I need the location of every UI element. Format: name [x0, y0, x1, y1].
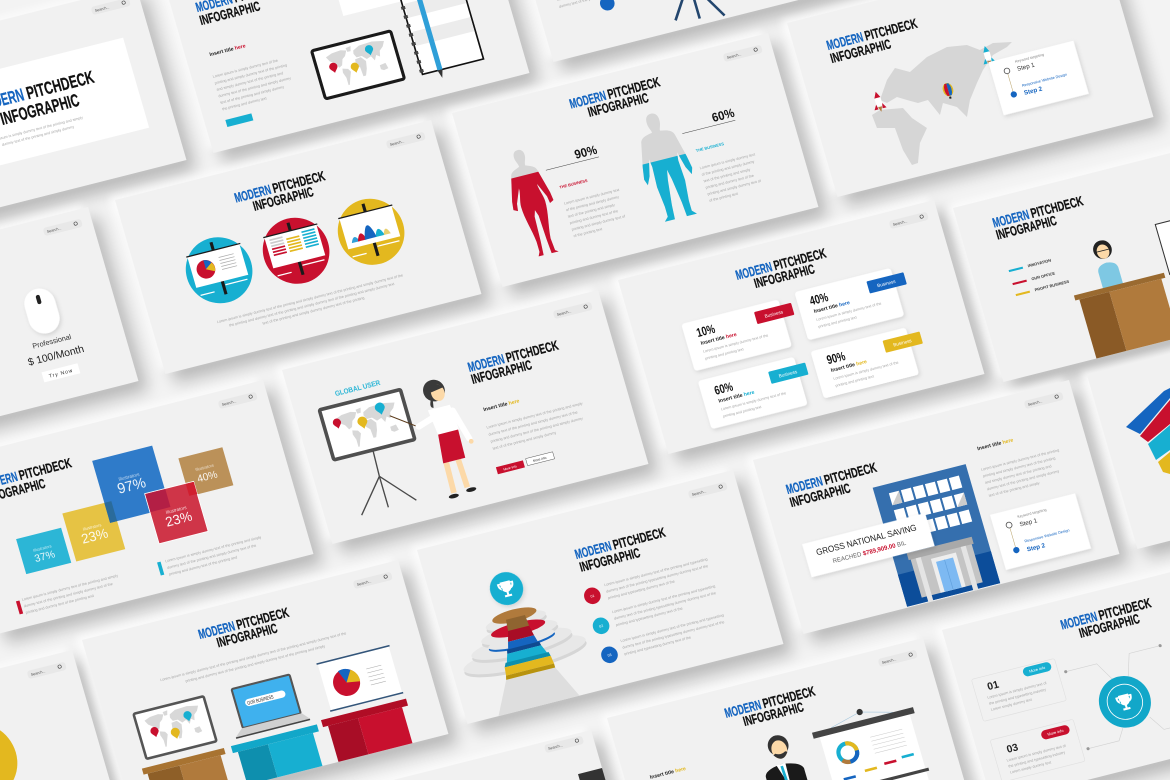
card 60%: Insert title here: [718, 390, 755, 404]
paragraph: Lorem ipsum is simply dummy text of the printing: [981, 448, 1060, 472]
search bar: Search...: [892, 219, 908, 227]
banner gross national saving: [802, 513, 935, 577]
card 01: 01: [986, 680, 1001, 693]
icon: cyan circle pie board: [178, 230, 260, 310]
square 37%: Illustrators: [32, 543, 52, 553]
title: MODERN: [825, 29, 865, 53]
panel: business cards slide: [618, 200, 984, 454]
paragraph: and simply dummy text of the printing and: [216, 71, 284, 92]
item 02: printing and typesetting dummy text of the: [615, 607, 683, 627]
text block left: dummy text of the printing and simply dummy text of the: [23, 582, 113, 608]
paragraph: Lorem ipsum is simply dummy text of the: [212, 59, 278, 79]
square 23% yellow: 23%: [80, 526, 110, 547]
icon: rocket red: [870, 90, 887, 113]
item 03: Lorem ipsum is simply dummy text of the printing and typesetting: [620, 613, 724, 643]
card 10%: Lorem ipsum is simply dummy text of the: [703, 333, 769, 354]
yellow circle: [0, 730, 18, 780]
notebook with pencil: [388, 0, 486, 82]
world map: [872, 42, 1012, 165]
description: dummy text of the printing and simply dummy: [1, 125, 75, 147]
search bar: [27, 662, 67, 679]
presenter figure: [1090, 238, 1124, 291]
panel: hub slide bottom right: [942, 550, 1170, 780]
item 03: [598, 613, 729, 665]
legend: [1008, 255, 1070, 297]
item 03: printing and typesetting dummy text of the: [624, 636, 692, 656]
search bar: [553, 302, 593, 319]
paragraph right: Lorem ipsum is simply dummy text: [699, 153, 756, 170]
banner gross national saving: REACHED $789,909.00 BIL: [832, 540, 907, 565]
card 90%: Insert title here: [830, 359, 868, 374]
card 60%: Lorem ipsum is simply dummy text of the: [721, 391, 787, 412]
title: MODERN: [784, 473, 824, 497]
card 01: More info: [1029, 665, 1046, 674]
icon: rocket cyan: [979, 44, 997, 67]
card 90%: Business: [893, 338, 913, 348]
tablet with world map: [312, 31, 404, 99]
description: Lorem ipsum is simply dummy text of the printing and simply dummy text of the printing and simply dummy text of the: [160, 631, 347, 682]
man in suit: [755, 731, 812, 780]
try now button: [41, 363, 80, 382]
board: [1155, 204, 1170, 274]
card 01: [971, 658, 1067, 721]
search bar: Search...: [221, 399, 237, 407]
paragraph: Lorem ipsum is simply dummy text of the printing and simply: [486, 402, 583, 430]
paragraph: printing and simply dummy text of the printing: [214, 63, 288, 85]
square 23% yellow: Illustrators: [82, 522, 102, 532]
card 10%: [681, 297, 803, 371]
paragraph left: of the printing and simply dummy: [566, 195, 619, 212]
search bar: [878, 650, 918, 667]
tripod legs: [666, 0, 725, 27]
step card: Step 2: [1023, 85, 1044, 97]
paragraph: text of of the printing and simply dummy: [220, 85, 285, 105]
square 97%: Illustrators: [118, 472, 141, 482]
title: MODERN: [991, 207, 1031, 231]
panel: mouse pricing slide: [0, 207, 138, 461]
paragraph left: [564, 188, 629, 238]
white title panel: [0, 38, 149, 177]
icon: layered chevron arrows: [1126, 388, 1170, 474]
numbered circle: [598, 0, 616, 12]
legend: PROFIT BUSINESS: [1034, 279, 1070, 292]
card 40%: printing and printing text: [818, 315, 857, 329]
panel: world map steps slide: [787, 0, 1157, 208]
card 40%: 40%: [808, 290, 830, 308]
square 23% red: 23%: [164, 509, 194, 530]
search bar: Search...: [691, 489, 707, 497]
card 90%: 90%: [825, 349, 847, 367]
panel: global user presenter slide: [282, 290, 648, 544]
button red: More info: [503, 464, 517, 472]
title: PITCHDECK: [234, 605, 291, 632]
search bar: Search...: [46, 226, 62, 234]
panel: presenter man slide: [607, 638, 973, 780]
search bar: [688, 482, 728, 499]
paragraph: the printing and dummy text: [222, 96, 267, 111]
card 01: the printing and typesetting industry: [989, 688, 1047, 706]
search bar: Search...: [30, 669, 46, 677]
square 40%: Illustrators: [195, 463, 214, 472]
square 37%: [16, 528, 71, 574]
card 60%: [698, 355, 817, 429]
text block left: Lorem ipsum is simply dummy text of the printing and simply: [21, 574, 119, 602]
card 60%: 60%: [713, 380, 735, 398]
item 01: 01: [590, 594, 595, 599]
description: printing and dummy text of the printing and simply dummy text of the printing and simply: [185, 644, 326, 683]
title: [734, 246, 832, 295]
square 23% red: [145, 481, 208, 544]
text block right: [157, 535, 266, 578]
item 02: Lorem ipsum is simply dummy text of the printing and typesetting: [612, 584, 716, 614]
title: PITCHDECK: [606, 74, 662, 102]
card 03: Lorem simply dummy text: [1010, 760, 1052, 775]
insert title: Insert title here: [209, 43, 247, 58]
title: INFOGRAPHIC: [469, 357, 534, 387]
step card: Step 1: [1016, 62, 1036, 73]
paragraph right: printing and simply dummy text of: [707, 179, 762, 196]
title: INFOGRAPHIC: [788, 480, 852, 510]
item 02: 02: [599, 624, 604, 629]
pyramid tiers: [451, 594, 590, 685]
paragraph right: of the printing text: [709, 192, 738, 203]
paragraph right: text of the printing and simply: [703, 168, 751, 183]
title: PITCHDECK: [611, 525, 667, 552]
title: [233, 168, 330, 218]
title: INFOGRAPHIC: [829, 36, 893, 66]
step card: [990, 493, 1091, 570]
title: INFOGRAPHIC: [251, 184, 315, 214]
card 60%: printing and printing text: [723, 405, 762, 419]
search bar: [386, 132, 426, 149]
title: [723, 684, 821, 733]
title: INFOGRAPHIC: [1077, 611, 1142, 641]
card 10%: printing and printing text: [705, 347, 744, 361]
card 03: the printing and typesetting industry: [1008, 750, 1066, 769]
title: PITCHDECK: [271, 168, 327, 196]
search bar: Search...: [1027, 399, 1043, 407]
text block right: dummy text of the printing and simply dummy text of the: [167, 544, 257, 570]
chart board: [316, 645, 403, 712]
red podium: [321, 698, 412, 762]
title: MODERN: [196, 618, 237, 642]
step card: Keyword targeting: [1015, 53, 1045, 64]
paragraph: printing and dummy text of the printing and simply dummy: [490, 417, 583, 444]
description: Lorem ipsum is simply dummy text of the printing and simply dummy text of the printing and simply dummy text of the: [217, 273, 404, 324]
text block right: Lorem ipsum is simply dummy text of the printing and simply: [165, 535, 262, 563]
white card: [333, 0, 400, 16]
laptop: [222, 673, 310, 739]
title: [568, 74, 665, 124]
card 90%: Lorem ipsum is simply dummy text of the: [833, 361, 899, 381]
brown podium: [142, 748, 237, 780]
description: text of the printing and simply dummy dummy text of the printing: [262, 296, 365, 326]
title: MODERN: [233, 182, 273, 206]
title: PITCHDECK: [761, 684, 817, 711]
search bar: [1024, 392, 1064, 409]
hanger: [828, 701, 893, 728]
title: MODERN: [568, 88, 608, 112]
paragraph: dummy text of the printing and simply dummy: [986, 469, 1060, 491]
title: [573, 525, 671, 575]
panel: circles slide: [115, 120, 481, 374]
paragraph: dummy text of the printing and simply dummy: [218, 76, 291, 98]
tablet with map: [133, 696, 217, 759]
card 10%: Insert title here: [700, 332, 738, 347]
insert title: Insert title here: [977, 437, 1014, 452]
search bar: [353, 572, 393, 589]
card 40%: Lorem ipsum is simply dummy text of the: [816, 302, 882, 322]
title: INFOGRAPHIC: [994, 213, 1059, 243]
item 01: Lorem ipsum is simply dummy text of the printing and typesetting: [604, 557, 708, 587]
paragraph: and simply dummy text of the printing and: [984, 464, 1052, 485]
square 37%: 37%: [33, 549, 56, 565]
panel: arrows slide: [1087, 295, 1170, 549]
button outline: More info: [533, 456, 547, 463]
search bar: Search...: [881, 657, 897, 665]
title: PITCHDECK: [17, 455, 73, 483]
title: INFOGRAPHIC: [578, 545, 642, 575]
title: MODERN: [1059, 609, 1099, 633]
panel: speaker desk slide: [953, 128, 1170, 382]
card 01: Lorem ipsum is simply dummy text of: [987, 681, 1048, 700]
paragraph right: printing and dummy text of the: [705, 174, 754, 190]
search bar: [91, 0, 131, 15]
paragraph: text of of the printing and simply dummy: [492, 431, 557, 451]
step card: Keyword targeting: [1017, 508, 1047, 519]
square 97%: 97%: [116, 475, 148, 498]
connector dots: [1063, 644, 1170, 751]
cyan podium: [231, 724, 330, 780]
paragraph: [981, 448, 1067, 498]
search bar: Search...: [356, 579, 372, 587]
title: MODERN: [734, 259, 774, 283]
search bar: [43, 219, 83, 236]
item 01: dummy text of the printing typesetting dummy dummy text of the: [606, 564, 709, 594]
description: the printing and dummy text of the printing and simply dummy text of the printing and simply dummy text: [229, 282, 395, 328]
search bar: Search...: [94, 5, 110, 13]
paragraph: dummy text of the printing and simply dummy text of the: [488, 410, 578, 437]
card 10%: 10%: [695, 322, 717, 340]
laptop: OUR BUSINESS: [247, 694, 275, 707]
panel: cover slide top left: [0, 0, 186, 240]
title: PITCHDECK: [1029, 193, 1085, 221]
step card: Responsive Website Design: [1024, 528, 1070, 544]
card 60%: Business: [778, 369, 798, 379]
card 40%: Business: [876, 279, 897, 288]
text block left: printing and dummy text of the printing and: [25, 594, 94, 615]
dark device: [578, 768, 606, 780]
title: PITCHDECK: [504, 338, 560, 365]
button: [225, 113, 253, 127]
title: MODERN: [573, 538, 613, 562]
item 03: dummy text of the printing typesetting dummy dummy text of the: [622, 620, 725, 650]
search bar: [889, 212, 929, 229]
search bar: Search...: [548, 743, 563, 751]
icon: yellow circle area board: [330, 192, 412, 272]
search bar: [544, 736, 584, 753]
stat 90%: 90%: [573, 143, 599, 162]
woman presenter: [383, 374, 488, 508]
title: [0, 67, 102, 134]
card 40%: Insert title here: [813, 300, 851, 315]
search bar: [723, 45, 763, 62]
item 02: dummy text of the printing typesetting dummy dummy text of the: [613, 591, 717, 621]
panel: podiums slide: [82, 560, 450, 780]
panel: pyramid slide: [417, 470, 784, 726]
icon: computer mouse: [21, 285, 63, 337]
title: [196, 605, 294, 654]
title: PITCHDECK: [772, 246, 828, 273]
search bar: [218, 392, 258, 409]
square 23% red: Illustrators: [165, 505, 188, 515]
title: INFOGRAPHIC: [752, 261, 817, 291]
paragraph: [212, 57, 295, 111]
paragraph: [486, 402, 589, 451]
panel: illustrators squares slide: [0, 380, 313, 634]
card 90%: printing and printing text: [835, 374, 874, 388]
card 03: Lorem ipsum is simply dummy text of: [1006, 744, 1067, 763]
insert title: Insert title here: [483, 398, 520, 413]
paragraph left: Lorem ipsum is simply dummy text: [564, 188, 620, 206]
building: [873, 464, 1000, 608]
paragraph right: of the printing and simply dummy: [701, 160, 755, 177]
square 40%: 40%: [196, 470, 219, 485]
card 40%: [794, 265, 915, 340]
item 01: [582, 557, 712, 606]
item 01: printing and typesetting dummy text of the: [608, 580, 675, 600]
hub circle with trophy: [1093, 670, 1157, 733]
stat 60%: 60%: [710, 106, 736, 125]
paragraph: text of of the printing and simply: [988, 481, 1040, 498]
connectors: [1065, 646, 1170, 749]
title: PITCHDECK: [24, 67, 96, 103]
legend: OUR OFFICE: [1031, 270, 1056, 281]
title: MODERN: [466, 351, 506, 375]
podium desk: [1074, 273, 1170, 359]
stairs column: [490, 611, 555, 680]
square 23% yellow: [62, 501, 125, 561]
panel: top centre slide: [503, 0, 869, 62]
pricing label: Professional: [31, 332, 73, 351]
icon: hot air balloon: [941, 82, 956, 100]
title: MODERN: [723, 697, 763, 721]
paragraph left: printing and dummy text of the: [569, 209, 619, 225]
step card: Step 2: [1026, 542, 1047, 553]
price: $ 100/Month: [27, 344, 86, 369]
search bar: Search...: [556, 309, 572, 317]
presentation board with map: [319, 389, 415, 460]
search bar: Search...: [389, 139, 405, 147]
global user heading: GLOBAL USER: [334, 378, 382, 398]
step card: Step 1: [1019, 517, 1039, 528]
paragraph left: printing and simply dummy text of: [571, 214, 627, 232]
panel: notebook slide: [163, 0, 529, 153]
icon: trophy circle: [486, 568, 527, 609]
button outline: [526, 452, 555, 466]
paragraph left: of the printing text: [573, 227, 603, 238]
card 90%: [810, 324, 931, 399]
try now button: Try Now: [48, 368, 74, 380]
card 01: Lorem simply dummy text: [990, 698, 1032, 712]
square 40%: [178, 447, 233, 496]
card 03: 03: [1005, 742, 1020, 756]
panel: national saving slide: [753, 380, 1119, 634]
text block right: printing and dummy text of the printing and: [169, 555, 238, 576]
projection board: [812, 707, 934, 780]
legend: INNOVATION: [1027, 258, 1052, 268]
title: INFOGRAPHIC: [741, 699, 806, 729]
banner gross national saving: GROSS NATIONAL SAVING: [815, 522, 918, 557]
search bar: Search...: [726, 52, 742, 60]
stat 60%: [678, 106, 743, 155]
stat 60%: THE BUSINESS: [695, 141, 725, 153]
paragraph right: [699, 153, 765, 203]
title: PITCHDECK: [863, 16, 919, 43]
title: INFOGRAPHIC: [586, 90, 650, 120]
female silhouette 90%: [511, 150, 558, 256]
title: PITCHDECK: [822, 460, 879, 487]
stat 90%: [542, 143, 605, 192]
card 03: [990, 719, 1085, 780]
button red: [496, 460, 525, 474]
stat 90%: THE BUSINESS: [559, 178, 588, 190]
card 03: More info: [1047, 728, 1065, 737]
item 03: 03: [607, 653, 612, 658]
panel: bottom centre slide: [275, 730, 641, 780]
step card: Responsive Website Design: [1022, 73, 1067, 88]
paragraph: printing and simply dummy text of the printing: [983, 456, 1056, 478]
step card: [988, 41, 1089, 115]
title: INFOGRAPHIC: [215, 621, 279, 650]
square 97%: [92, 446, 170, 523]
panel: body percentages slide: [452, 33, 818, 287]
tripod: [345, 444, 417, 515]
icon: red circle bars board: [255, 211, 337, 291]
item 02: [590, 584, 720, 636]
floor beam: [498, 668, 579, 716]
text block left: [15, 574, 122, 616]
male silhouette 60%: [641, 114, 697, 222]
title: INFOGRAPHIC: [0, 90, 82, 129]
card 10%: Business: [764, 309, 784, 319]
title: [1059, 595, 1157, 645]
panel: yellow circle slide bottom left: [0, 654, 110, 780]
paragraph left: text of the printing and simply: [567, 203, 615, 219]
